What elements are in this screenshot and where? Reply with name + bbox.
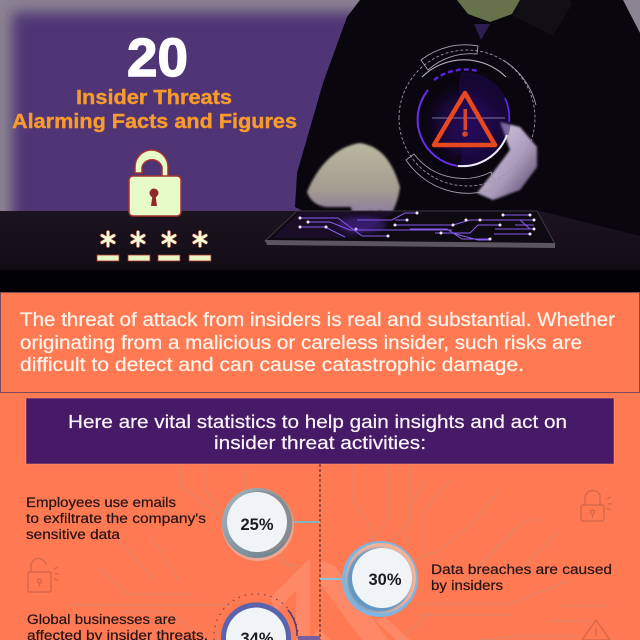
title number 20: 20	[127, 28, 188, 88]
description: Global businesses are	[27, 612, 176, 627]
icon: watermark lock left	[28, 558, 59, 592]
left hand	[307, 143, 400, 228]
introduction text	[20, 309, 616, 376]
icon: watermark warning	[582, 620, 610, 640]
panel: statistics heading	[26, 398, 614, 464]
value: 25%	[240, 515, 274, 534]
value: 30%	[368, 570, 402, 589]
decorative arrow	[270, 558, 410, 640]
heading text: Here are vital statistics to help gain insights and act on	[68, 411, 567, 432]
icon: open padlock	[129, 150, 181, 216]
title text: Insider Threats	[76, 86, 232, 109]
connector	[320, 578, 341, 580]
title text	[12, 86, 297, 133]
description: by insiders	[431, 578, 503, 593]
stat: 25 percent	[26, 488, 320, 561]
timeline dashed spine	[319, 464, 321, 640]
warning triangle	[434, 93, 495, 145]
description: Employees use emails	[26, 495, 176, 510]
description: to exfiltrate the company's	[26, 511, 206, 526]
table surface	[0, 211, 640, 292]
title text: Alarming Facts and Figures	[12, 110, 297, 133]
description: sensitive data	[26, 527, 121, 542]
introduction text: The threat of attack from insiders is real and substantial. Whether	[20, 309, 616, 331]
introduction text: difficult to detect and can cause catastrophic damage.	[20, 354, 524, 376]
description: Data breaches are caused	[431, 562, 612, 577]
introduction text: originating from a malicious or careless insider, such risks are	[20, 332, 582, 354]
description	[27, 612, 208, 640]
stat: 30 percent	[320, 541, 612, 617]
icon: watermark lock right	[581, 491, 612, 521]
description	[26, 495, 206, 542]
connector	[291, 521, 320, 523]
description	[431, 562, 612, 593]
section background with faint circuit traces	[0, 393, 640, 640]
holographic warning icon	[399, 45, 536, 193]
heading text: insider threat activities:	[214, 432, 426, 453]
person in dark shirt	[295, 0, 640, 236]
stat: 34 percent	[27, 594, 320, 640]
right hand	[477, 122, 537, 200]
hero banner	[0, 0, 640, 292]
icon: password asterisks	[97, 232, 211, 261]
heading text	[68, 411, 567, 453]
panel: introduction	[0, 292, 640, 393]
tablet with circuit lines	[265, 211, 555, 248]
